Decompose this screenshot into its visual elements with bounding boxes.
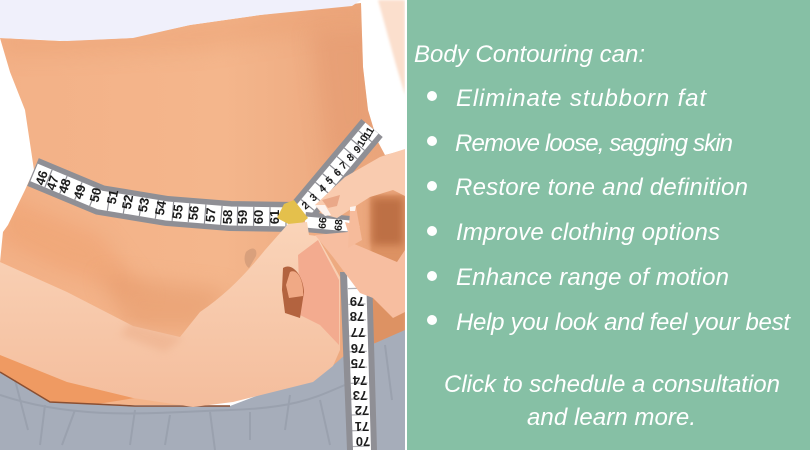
call to action <box>444 371 780 431</box>
tape metal tip <box>277 200 308 224</box>
measuring tape: waist section: 53 <box>135 196 152 213</box>
benefits list: Remove loose, sagging skin <box>455 130 733 157</box>
grey trousers <box>0 330 405 450</box>
panel: green benefits panel <box>407 0 810 450</box>
measuring tape: hanging section: 74 <box>352 373 367 388</box>
call to action: Click to schedule a consultation <box>444 371 780 398</box>
measuring tape: hanging section <box>340 272 377 450</box>
benefits list: Enhance range of motion <box>456 264 729 291</box>
measuring tape: waist section: 48 <box>55 177 74 195</box>
navel <box>245 249 256 268</box>
measuring tape: waist section: 10 <box>355 133 371 149</box>
benefits list: Improve clothing options <box>456 219 720 246</box>
fingernails <box>315 205 331 216</box>
measuring tape: waist section: 50 <box>86 186 105 204</box>
measuring tape: waist section: 11 <box>361 125 377 141</box>
lower fingers <box>315 222 405 318</box>
thumb <box>315 149 405 218</box>
measuring tape: hanging section: 73 <box>353 388 367 403</box>
curled finger and shadow <box>282 267 304 318</box>
measuring tape: waist section: 7 <box>338 159 350 172</box>
measuring tape: waist section: 52 <box>119 193 136 210</box>
measuring tape: waist section: 49 <box>70 183 89 201</box>
call to action: and learn more. <box>527 404 696 431</box>
hand and arm measuring from the left <box>0 222 340 407</box>
benefits list <box>427 85 791 336</box>
measuring tape: waist section: 60 <box>251 210 266 224</box>
benefits list: Restore tone and definition <box>455 174 748 201</box>
measuring tape: hanging section: 76 <box>351 341 365 356</box>
measuring tape: hanging section: 79 <box>350 294 364 309</box>
measuring tape: waist section: 56 <box>185 205 202 221</box>
measuring tape: waist section: 6 <box>332 166 344 179</box>
measuring tape: waist section: 5 <box>324 174 336 187</box>
measuring tape: waist section: 51 <box>104 188 121 206</box>
index finger shading <box>298 240 339 345</box>
measuring tape: waist section: 46 <box>32 169 51 187</box>
measuring tape: waist section: 66 <box>317 217 329 229</box>
measuring tape: waist section: 59 <box>235 210 250 224</box>
arm crease <box>124 324 178 350</box>
measuring tape: waist section: 61 <box>267 210 282 224</box>
measuring tape: hanging section: 75 <box>351 356 365 371</box>
torso <box>0 0 405 410</box>
measuring tape: waist section <box>32 125 377 231</box>
heading: Body Contouring can: <box>414 41 645 68</box>
measuring tape: waist section: 54 <box>152 199 169 216</box>
measuring tape: waist section: 3 <box>308 191 320 204</box>
background arm at top right <box>378 0 405 95</box>
benefits list: Help you look and feel your best <box>456 309 791 336</box>
measuring tape: hanging section: 70 <box>356 434 370 449</box>
measuring tape: waist section: 9 <box>352 143 364 156</box>
measuring tape: hanging section: 72 <box>355 403 369 418</box>
measuring tape: waist section: 4 <box>317 182 329 195</box>
measuring tape: waist section: 58 <box>220 209 235 224</box>
photo: waist being measured with a tape <box>0 0 405 450</box>
measuring tape: hanging section: 78 <box>350 309 364 324</box>
measuring tape: waist section: 8 <box>345 151 357 164</box>
measuring tape: waist section: 2 <box>300 199 312 212</box>
measuring tape: hanging section: 71 <box>355 419 369 434</box>
measuring tape: waist section: 57 <box>203 207 218 223</box>
white top <box>0 0 361 41</box>
benefits list: Eliminate stubborn fat <box>456 85 707 112</box>
measuring tape: hanging section: 77 <box>351 325 365 340</box>
measuring tape: waist section: 55 <box>169 204 186 220</box>
measuring tape: waist section: 47 <box>43 174 62 192</box>
hand holding tape from the right <box>315 149 405 318</box>
measuring tape: waist section: 68 <box>333 219 345 231</box>
